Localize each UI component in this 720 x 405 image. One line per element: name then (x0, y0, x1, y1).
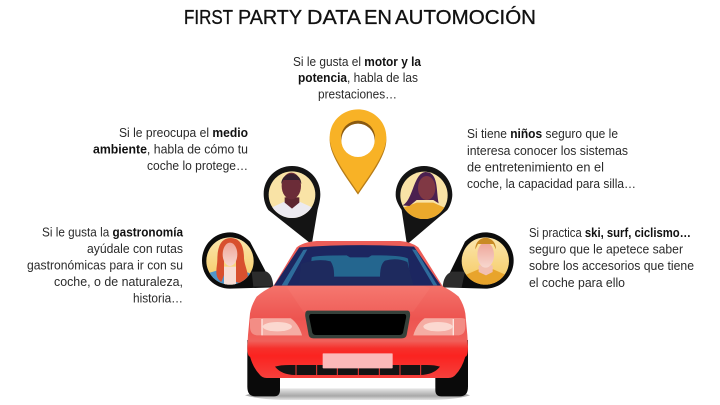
text block: niños: coche, la capacidad para silla… (467, 176, 636, 191)
text block: gastronomía: gastronómicas para ir con su (27, 258, 183, 272)
shadow (245, 388, 470, 400)
text block: deportes: el coche para ello (529, 275, 625, 290)
icon: gold location pin (330, 109, 386, 195)
text block: niños: Si tiene niños seguro que le (467, 126, 618, 141)
text block: deportes: sobre los accesorios que tiene (529, 258, 694, 273)
text block: gastronomía: Si le gusta la gastronomía (42, 224, 184, 240)
title (184, 6, 536, 29)
text block: niños (467, 126, 636, 191)
icon: pin man (264, 166, 320, 243)
text block: medio ambiente (93, 125, 248, 173)
headlight right (413, 318, 465, 335)
text block: medio ambiente: coche lo protege… (147, 158, 248, 173)
title: DATA (307, 7, 362, 29)
icon: pin man cap (443, 232, 514, 289)
hood crease panel (287, 286, 430, 312)
icon: pin woman red hair (202, 232, 274, 289)
text block: motor: prestaciones… (318, 86, 397, 102)
text block: deportes: Si practica ski, surf, ciclismo… (529, 225, 691, 240)
text block: motor: potencia, habla de las (298, 70, 418, 85)
interior (310, 255, 410, 277)
body (247, 286, 468, 378)
roof (272, 241, 444, 288)
lower grille (275, 365, 440, 375)
text block: gastronomía: coche, o de naturaleza, (54, 274, 183, 289)
text block: motor (293, 54, 422, 102)
wheels (247, 340, 468, 396)
text block: gastronomía: historia… (133, 290, 183, 306)
text block: motor: Si le gusta el motor y la (293, 54, 422, 69)
title: EN (364, 7, 392, 29)
windshield (273, 245, 442, 287)
seats (299, 259, 413, 285)
text block: niños: interesa conocer los sistemas (467, 143, 628, 158)
grille (305, 311, 410, 338)
text block: gastronomía: ayúdale con rutas (87, 241, 183, 256)
title: PARTY (238, 7, 302, 29)
car (245, 241, 470, 400)
text block: medio ambiente: Si le preocupa el medio (119, 125, 248, 140)
licence plate (323, 353, 393, 368)
headlight left (250, 318, 302, 335)
text block: niños: de entretenimiento en el (467, 160, 604, 174)
text block: deportes (529, 225, 694, 290)
title: AUTOMOCIÓN (395, 6, 536, 29)
text block: gastronomía (27, 224, 184, 306)
title: FIRST (184, 7, 233, 29)
text block: deportes: seguro que le apetece saber (529, 242, 684, 256)
windshield side stripes (282, 249, 437, 285)
icon: pin woman dark hair (396, 166, 452, 243)
text block: medio ambiente: ambiente, habla de cómo tu (93, 142, 248, 156)
